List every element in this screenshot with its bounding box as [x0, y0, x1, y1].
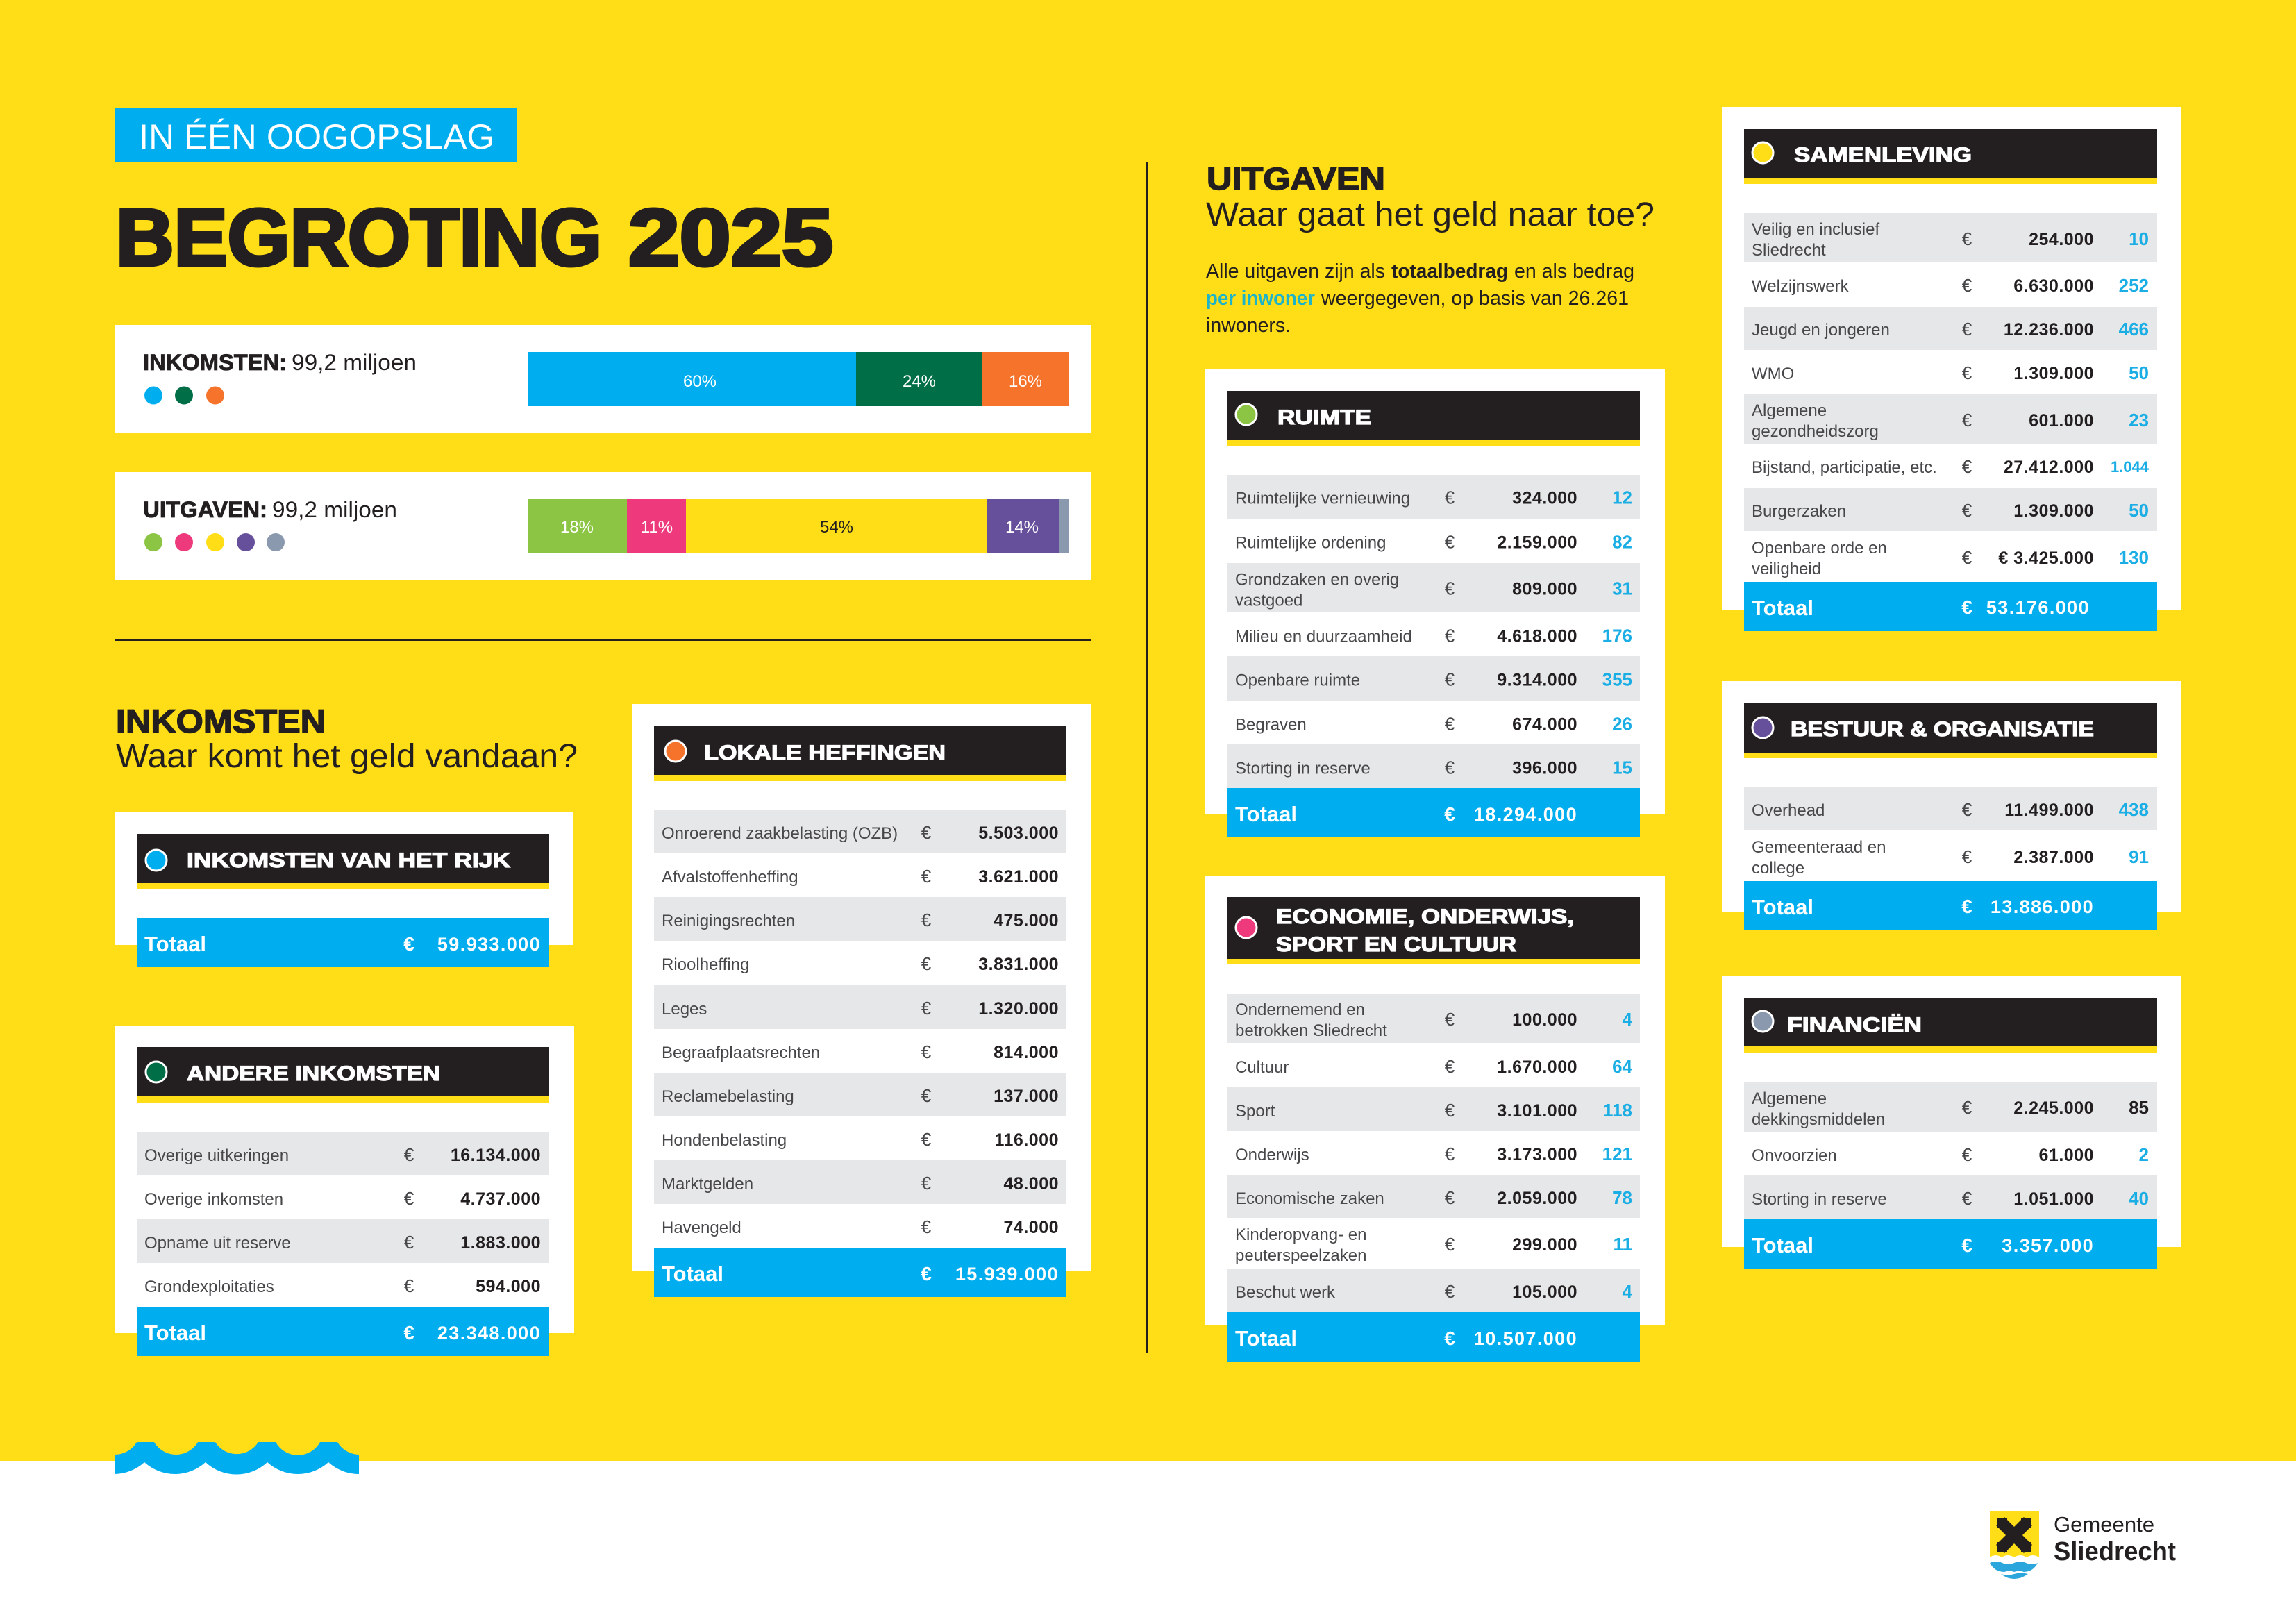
- text block: uitgaven intro: weergegeven, op basis van 26.261: [1321, 287, 1629, 310]
- heading: uitgaven: UITGAVEN: [1207, 161, 1385, 196]
- rows: 475.000: [994, 911, 1059, 930]
- rows: €: [1962, 1144, 1972, 1165]
- rows: Grondexploitaties: [144, 1278, 274, 1296]
- rows: Kinderopvang- en: [1235, 1225, 1366, 1244]
- header: [1227, 897, 1640, 964]
- rows: 1.051.000: [2013, 1189, 2094, 1209]
- rows: Leges: [662, 1000, 707, 1019]
- total: €: [403, 933, 414, 955]
- rows: Algemene: [1752, 401, 1827, 420]
- rows: WMO: [1752, 365, 1794, 383]
- header: SAMENLEVING: [1794, 144, 1972, 167]
- rows: 50: [2129, 362, 2149, 383]
- heading: uitgaven: Waar gaat het geld naar toe?: [1206, 196, 1654, 233]
- rows: [654, 810, 1066, 1237]
- total: €: [1961, 596, 1972, 618]
- rows: vastgoed: [1235, 592, 1302, 610]
- header: [137, 1047, 549, 1103]
- uitgaven stacked bar: 11%: [641, 518, 673, 537]
- uitgaven stacked bar: [528, 499, 1069, 553]
- rows: Storting in reserve: [1235, 760, 1371, 778]
- text block: uitgaven intro: Alle uitgaven zijn als: [1206, 260, 1385, 283]
- rows: Veilig en inclusief: [1752, 220, 1879, 239]
- rows: peuterspeelzaken: [1235, 1246, 1366, 1265]
- panel: economie, onderwijs, sport en cultuur: [1205, 876, 1665, 1362]
- rows: €: [1445, 669, 1455, 690]
- header: [1744, 703, 2157, 758]
- rows: gezondheidszorg: [1752, 422, 1879, 441]
- rows: 26: [1612, 714, 1632, 735]
- rows: Hondenbelasting: [662, 1131, 787, 1150]
- rows: 4.618.000: [1497, 626, 1577, 646]
- heading: uitgaven: [1206, 161, 1654, 233]
- uitgaven summary label: 99,2 miljoen: [272, 497, 397, 522]
- total: Totaal: [144, 932, 206, 956]
- title: 2025: [628, 192, 833, 283]
- rows: Burgerzaken: [1752, 502, 1846, 521]
- panel: inkomsten van het rijk: [115, 812, 573, 967]
- rows: 3.621.000: [978, 867, 1059, 887]
- rows: Onroerend zaakbelasting (OZB): [662, 824, 898, 843]
- total: Totaal: [1752, 895, 1813, 919]
- total: [1744, 881, 2157, 930]
- header: [1744, 998, 2157, 1053]
- rows: 78: [1612, 1187, 1632, 1208]
- rows: 15: [1612, 757, 1632, 778]
- rows: 2.245.000: [2013, 1098, 2094, 1118]
- logo: gemeente sliedrecht: Sliedrecht: [2054, 1537, 2176, 1566]
- total: [654, 1248, 1066, 1297]
- total: €: [1444, 803, 1455, 825]
- text block: uitgaven intro: totaalbedrag: [1391, 260, 1508, 283]
- rows: 3.101.000: [1497, 1101, 1577, 1121]
- total: Totaal: [662, 1262, 723, 1286]
- rows: 3.831.000: [978, 955, 1059, 974]
- rows: 299.000: [1512, 1235, 1577, 1255]
- header: [1227, 391, 1640, 446]
- rows: 4: [1623, 1281, 1633, 1302]
- inkomsten stacked bar: [528, 352, 1069, 406]
- uitgaven summary label: UITGAVEN:: [143, 497, 267, 522]
- rows: [1744, 787, 2157, 878]
- rows: 74.000: [1004, 1218, 1059, 1237]
- header: RUIMTE: [1277, 406, 1371, 429]
- total: 53.176.000: [1986, 597, 2090, 618]
- total: €: [1961, 1234, 1972, 1256]
- rows: Overige uitkeringen: [144, 1146, 289, 1165]
- rows: €: [1445, 714, 1455, 735]
- rows: 4.737.000: [460, 1189, 541, 1209]
- rows: Storting in reserve: [1752, 1190, 1887, 1209]
- rows: 254.000: [2029, 230, 2094, 249]
- rows: €: [1962, 500, 1972, 521]
- rows: 64: [1612, 1056, 1633, 1077]
- rows: €: [921, 998, 932, 1019]
- header: ECONOMIE, ONDERWIJS,: [1276, 905, 1574, 928]
- rows: Beschut werk: [1235, 1283, 1336, 1302]
- rows: €: [921, 866, 932, 887]
- rows: [137, 1132, 549, 1296]
- inkomsten stacked bar: 16%: [1009, 372, 1042, 391]
- rows: Ruimtelijke vernieuwing: [1235, 489, 1410, 508]
- rows: 2.159.000: [1497, 533, 1577, 553]
- rows: 50: [2129, 500, 2149, 521]
- inkomsten summary label: INKOMSTEN:: [143, 350, 287, 375]
- rows: 31: [1612, 578, 1632, 598]
- total: [137, 1307, 549, 1356]
- rows: 121: [1602, 1144, 1632, 1164]
- rows: €: [1445, 625, 1455, 646]
- rows: Welzijnswerk: [1752, 277, 1850, 296]
- header: [1744, 129, 2157, 184]
- rows: Marktgelden: [662, 1175, 753, 1194]
- rows: 252: [2119, 275, 2149, 296]
- total: Totaal: [1752, 1233, 1813, 1257]
- header: FINANCIËN: [1787, 1014, 1922, 1037]
- rows: 396.000: [1512, 758, 1577, 778]
- total: [1227, 788, 1640, 837]
- panel: financien: [1722, 976, 2181, 1269]
- inkomsten stacked bar: 24%: [903, 372, 936, 391]
- logo: gemeente sliedrecht: [1990, 1511, 2176, 1579]
- rows: €: [921, 1041, 932, 1062]
- rows: €: [1445, 1100, 1455, 1121]
- uitgaven summary label: [143, 497, 397, 522]
- rows: veiligheid: [1752, 560, 1821, 578]
- rows: Reinigingsrechten: [662, 912, 795, 930]
- rows: Overhead: [1752, 801, 1825, 820]
- rows: €: [921, 953, 932, 974]
- rows: 16.134.000: [451, 1146, 541, 1165]
- rows: €: [1962, 228, 1972, 249]
- rows: €: [404, 1275, 414, 1296]
- rows: 11: [1614, 1234, 1632, 1255]
- rows: 1.883.000: [460, 1233, 541, 1253]
- rows: €: [1445, 532, 1455, 553]
- inkomsten stacked bar: 60%: [683, 372, 717, 391]
- rows: €: [1962, 799, 1972, 820]
- rows: 1.309.000: [2013, 501, 2094, 521]
- rows: betrokken Sliedrecht: [1235, 1021, 1387, 1040]
- rows: Opname uit reserve: [144, 1234, 291, 1253]
- rows: Gemeenteraad en: [1752, 838, 1886, 857]
- rows: Jeugd en jongeren: [1752, 321, 1890, 340]
- rows: Openbare ruimte: [1235, 671, 1360, 690]
- uitgaven stacked bar: 54%: [820, 518, 853, 537]
- rows: Algemene: [1752, 1089, 1827, 1108]
- rows: 48.000: [1004, 1174, 1059, 1194]
- uitgaven stacked bar: 18%: [560, 518, 594, 537]
- rows: €: [921, 1085, 932, 1106]
- header: SPORT EN CULTUUR: [1276, 933, 1516, 956]
- rows: €: [404, 1232, 414, 1253]
- rows: Grondzaken en overig: [1235, 571, 1399, 589]
- rows: 1.670.000: [1497, 1057, 1577, 1077]
- total: [1227, 1312, 1640, 1362]
- rows: Havengeld: [662, 1219, 741, 1237]
- text block: uitgaven intro: en als bedrag: [1514, 260, 1634, 283]
- rows: 23: [2129, 410, 2149, 430]
- rows: 5.503.000: [978, 823, 1059, 843]
- inkomsten legend dots: [144, 386, 224, 404]
- panel: andere inkomsten: [115, 1026, 574, 1356]
- rows: 9.314.000: [1497, 671, 1577, 690]
- rows: 1.320.000: [978, 999, 1059, 1019]
- rows: 601.000: [2029, 411, 2094, 430]
- rows: Onderwijs: [1235, 1146, 1309, 1164]
- rows: €: [921, 822, 932, 843]
- rows: Ondernemend en: [1235, 1001, 1365, 1019]
- total: 59.933.000: [437, 934, 541, 955]
- total: Totaal: [144, 1321, 206, 1345]
- total: [1744, 1219, 2157, 1269]
- panel: bestuur en organisatie: [1722, 681, 2181, 930]
- total: [1744, 582, 2157, 631]
- rows: 137.000: [994, 1087, 1059, 1106]
- rows: Ruimtelijke ordening: [1235, 533, 1386, 553]
- rows: €: [1445, 1281, 1455, 1302]
- header: [654, 726, 1066, 781]
- tag: in een oogopslag: IN ÉÉN OOGOPSLAG: [139, 117, 494, 156]
- rows: 10: [2129, 228, 2149, 249]
- rows: 674.000: [1512, 715, 1577, 735]
- rows: €: [404, 1144, 414, 1165]
- panel: ruimte: [1205, 369, 1665, 837]
- rows: 85: [2129, 1097, 2149, 1118]
- rows: 100.000: [1512, 1010, 1577, 1030]
- panel: samenleving: [1722, 107, 2181, 631]
- rows: €: [1962, 547, 1972, 568]
- rows: 176: [1602, 625, 1632, 646]
- uitgaven legend dots: [144, 533, 285, 551]
- rows: Milieu en duurzaamheid: [1235, 628, 1412, 646]
- rows: €: [1962, 1188, 1972, 1209]
- icon: wave decoration: [115, 1442, 359, 1474]
- rows: [1227, 475, 1640, 788]
- rows: dekkingsmiddelen: [1752, 1110, 1885, 1129]
- rows: €: [1445, 1234, 1455, 1255]
- total: Totaal: [1235, 1326, 1297, 1350]
- rows: 116.000: [994, 1130, 1059, 1150]
- uitgaven stacked bar: 14%: [1005, 518, 1039, 537]
- rows: 91: [2129, 846, 2149, 867]
- rows: 40: [2129, 1188, 2149, 1209]
- tag: in een oogopslag: [115, 108, 517, 162]
- total: 3.357.000: [2002, 1235, 2094, 1256]
- icon: coat of arms: [1990, 1511, 2039, 1579]
- rows: €: [1445, 1187, 1455, 1208]
- rows: 12: [1612, 487, 1632, 508]
- rows: 814.000: [994, 1043, 1059, 1062]
- rows: Rioolheffing: [662, 955, 749, 974]
- rows: 324.000: [1512, 489, 1577, 508]
- header: LOKALE HEFFINGEN: [704, 742, 946, 764]
- total: 18.294.000: [1474, 804, 1577, 825]
- rows: Reclamebelasting: [662, 1087, 794, 1106]
- total: Totaal: [1752, 596, 1813, 620]
- rows: 130: [2119, 547, 2149, 568]
- rows: 11.499.000: [2004, 801, 2094, 820]
- rows: college: [1752, 859, 1804, 878]
- title: [116, 192, 833, 283]
- total: [137, 918, 549, 967]
- rows: €: [404, 1188, 414, 1209]
- total: 23.348.000: [437, 1323, 541, 1343]
- rows: Sliedrecht: [1752, 241, 1826, 260]
- inkomsten summary label: [143, 350, 417, 375]
- rows: 12.236.000: [2004, 320, 2094, 340]
- text block: uitgaven intro: inwoners.: [1206, 315, 1291, 337]
- rows: 466: [2119, 319, 2149, 340]
- rows: Economische zaken: [1235, 1189, 1384, 1208]
- rows: €: [1962, 275, 1972, 296]
- rows: €: [1445, 1056, 1455, 1077]
- rows: Cultuur: [1235, 1058, 1289, 1077]
- rows: € 3.425.000: [1998, 549, 2094, 568]
- rows: 809.000: [1512, 579, 1577, 598]
- rows: 82: [1612, 532, 1632, 553]
- total: €: [921, 1263, 932, 1284]
- total: 10.507.000: [1474, 1328, 1577, 1349]
- panel: lokale heffingen: [632, 704, 1091, 1297]
- rows: €: [1445, 757, 1455, 778]
- panel: uitgaven summary: [115, 472, 1091, 580]
- total: 13.886.000: [1991, 896, 2094, 917]
- rows: €: [1445, 578, 1455, 598]
- rows: Begraafplaatsrechten: [662, 1044, 820, 1062]
- rows: Onvoorzien: [1752, 1146, 1837, 1165]
- rows: 118: [1603, 1100, 1632, 1121]
- rows: 105.000: [1512, 1282, 1577, 1302]
- rows: €: [1962, 410, 1972, 430]
- total: €: [1961, 896, 1972, 917]
- rows: Sport: [1235, 1102, 1275, 1121]
- rows: €: [1445, 487, 1455, 508]
- rows: €: [1962, 319, 1972, 340]
- text block: uitgaven intro: per inwoner: [1206, 287, 1315, 310]
- rows: 2.387.000: [2013, 848, 2094, 867]
- rows: €: [1445, 1144, 1455, 1164]
- rows: [1227, 994, 1640, 1312]
- rows: €: [921, 1129, 932, 1150]
- header: ANDERE INKOMSTEN: [187, 1062, 440, 1085]
- header: [137, 834, 549, 889]
- rows: €: [1445, 1009, 1455, 1030]
- rows: 355: [1602, 669, 1632, 690]
- total: €: [403, 1322, 414, 1343]
- total: Totaal: [1235, 802, 1297, 826]
- heading: inkomsten: Waar komt het geld vandaan?: [116, 738, 578, 775]
- text block: uitgaven intro: [1206, 260, 1634, 337]
- title: BEGROTING: [116, 192, 602, 283]
- rows: Afvalstoffenheffing: [662, 868, 798, 887]
- header: BESTUUR & ORGANISATIE: [1791, 718, 2094, 741]
- rows: 2: [2139, 1144, 2149, 1165]
- rows: 3.173.000: [1497, 1145, 1577, 1164]
- rows: [1744, 213, 2157, 578]
- heading: inkomsten: [116, 703, 578, 775]
- rows: €: [1962, 362, 1972, 383]
- rows: €: [1962, 1097, 1972, 1118]
- rows: 27.412.000: [2004, 458, 2094, 477]
- rows: 1.044: [2111, 458, 2150, 476]
- rows: 594.000: [476, 1277, 541, 1296]
- rows: 2.059.000: [1497, 1189, 1577, 1208]
- rows: Openbare orde en: [1752, 539, 1887, 558]
- rows: Bijstand, participatie, etc.: [1752, 458, 1937, 477]
- rows: 6.630.000: [2013, 276, 2094, 296]
- inkomsten summary label: 99,2 miljoen: [292, 350, 417, 375]
- rows: 1.309.000: [2013, 364, 2094, 383]
- total: €: [1444, 1328, 1455, 1349]
- rows: Begraven: [1235, 715, 1307, 735]
- rows: €: [921, 910, 932, 930]
- rows: €: [1962, 846, 1972, 867]
- rows: 438: [2119, 799, 2149, 820]
- rows: 61.000: [2039, 1146, 2094, 1165]
- total: 15.939.000: [955, 1264, 1059, 1284]
- rows: €: [1962, 456, 1972, 477]
- panel: inkomsten summary: [115, 325, 1091, 433]
- heading: inkomsten: INKOMSTEN: [116, 703, 326, 739]
- rows: [1744, 1082, 2157, 1219]
- header: INKOMSTEN VAN HET RIJK: [187, 849, 510, 872]
- logo: gemeente sliedrecht: Gemeente: [2054, 1512, 2154, 1537]
- rows: Overige inkomsten: [144, 1190, 283, 1209]
- rows: €: [921, 1173, 932, 1194]
- rows: €: [921, 1216, 932, 1237]
- rows: 4: [1623, 1009, 1633, 1030]
